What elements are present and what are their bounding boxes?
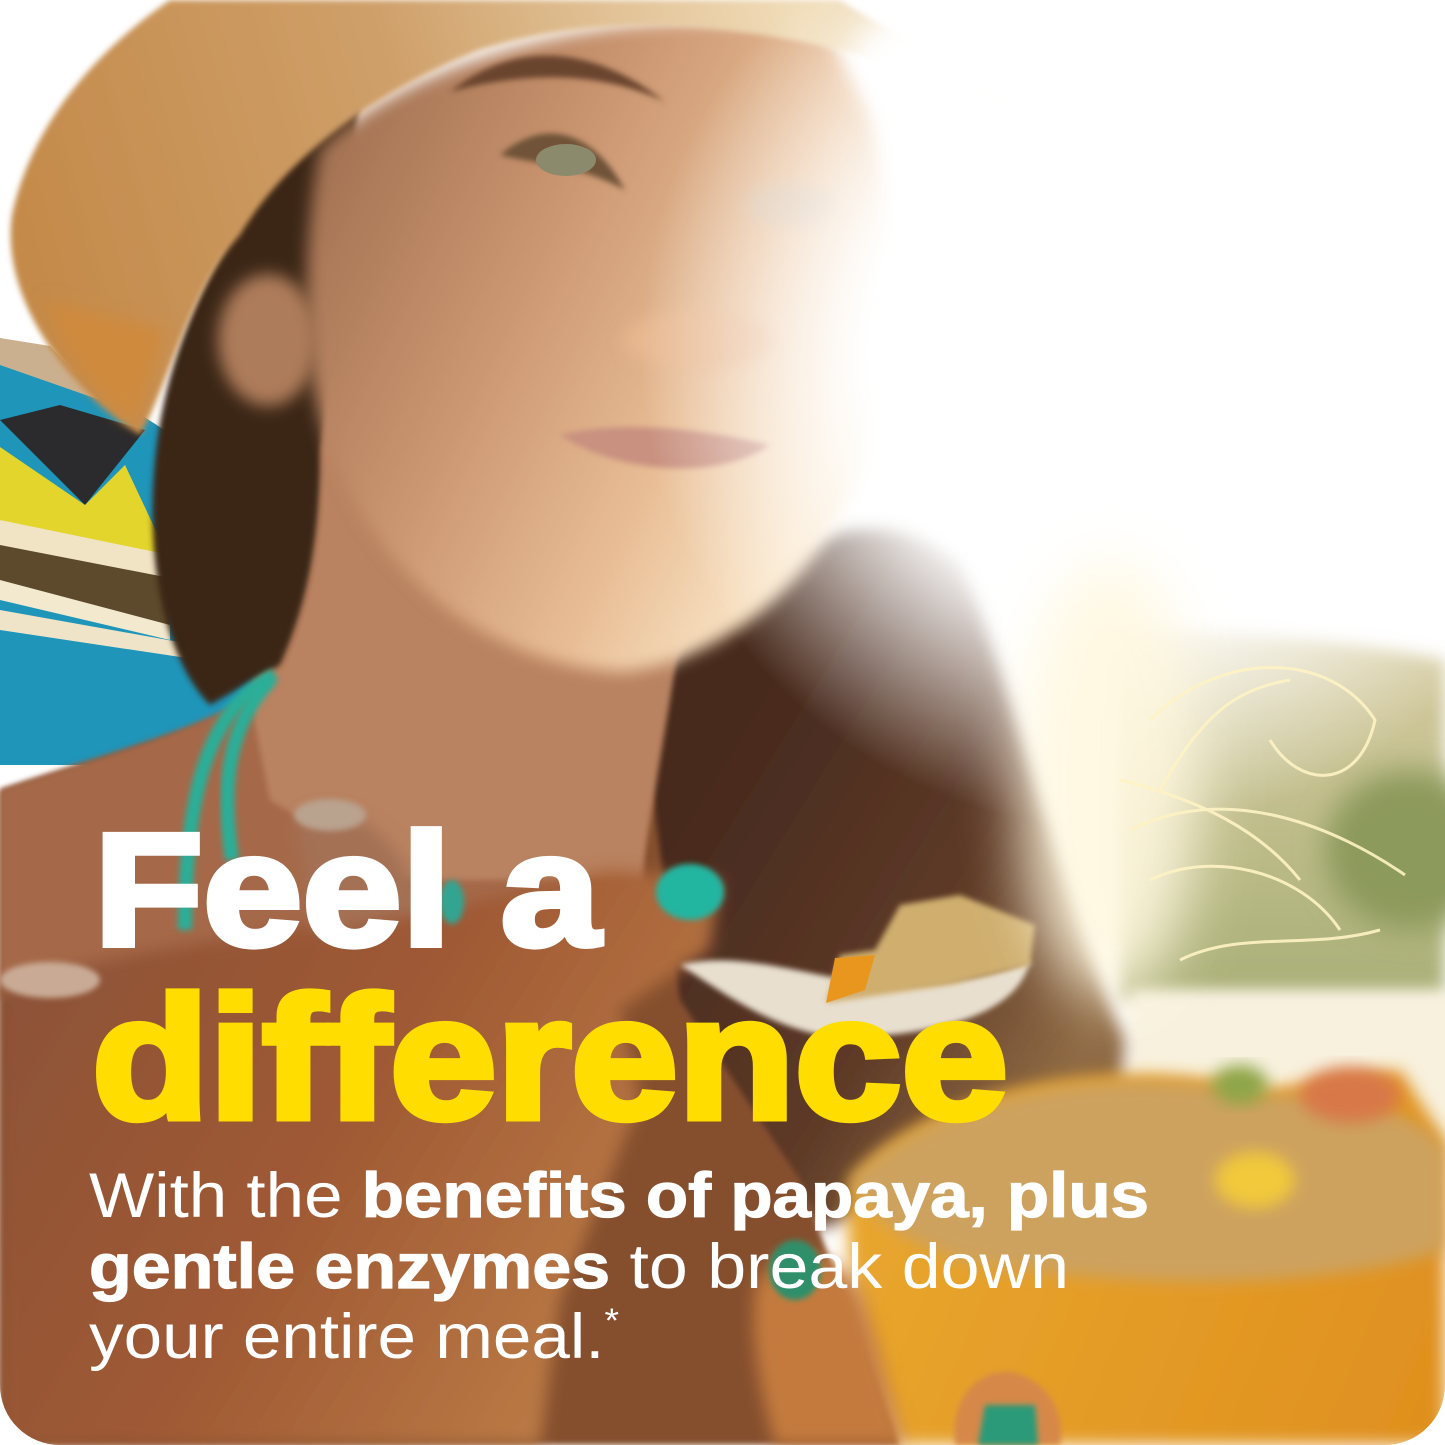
subheading line 3: * (604, 1302, 619, 1340)
fingers under bowl (754, 1240, 1061, 1445)
pale sea (1130, 990, 1445, 1160)
headline line: difference: difference (92, 960, 1008, 1155)
hair at left of face (152, 90, 360, 705)
subheading line 2: gentle enzymes to break down (89, 1232, 1069, 1302)
neck (250, 401, 679, 881)
eye (450, 56, 665, 190)
flare through hair (1020, 560, 1200, 1000)
blurred hand and fingers (0, 811, 720, 1445)
nose shadow (631, 324, 660, 350)
headline (92, 800, 1008, 1155)
ear (218, 274, 318, 406)
fingernails (0, 799, 724, 998)
swimsuit strap (185, 675, 275, 930)
hat edge fade into flare (837, 18, 984, 92)
subheading text (89, 1161, 1149, 1372)
lips (560, 427, 770, 468)
subheading line 1: With the benefits of papaya, plus (89, 1161, 1149, 1231)
lower body and arm base (0, 700, 900, 1445)
sun flare (657, 3, 1440, 805)
striped beach chair (0, 338, 256, 765)
face (307, 21, 888, 672)
backlit hair strands (1120, 668, 1405, 960)
chest and shoulder skin (0, 702, 644, 1000)
spoon with food (680, 895, 1035, 1038)
green shrubs (1325, 770, 1445, 930)
hat brim glow (45, 300, 165, 425)
headline line: Feel a: Feel a (94, 800, 601, 979)
long hair behind the shoulder (630, 529, 1125, 1230)
straw hat (6, 0, 886, 438)
subheading line 3: your entire meal. (89, 1302, 558, 1372)
distant hills (1120, 625, 1445, 1000)
papaya bowl with grains (847, 1065, 1445, 1445)
swimsuit strap inner (227, 680, 270, 860)
second eye area (754, 198, 767, 209)
